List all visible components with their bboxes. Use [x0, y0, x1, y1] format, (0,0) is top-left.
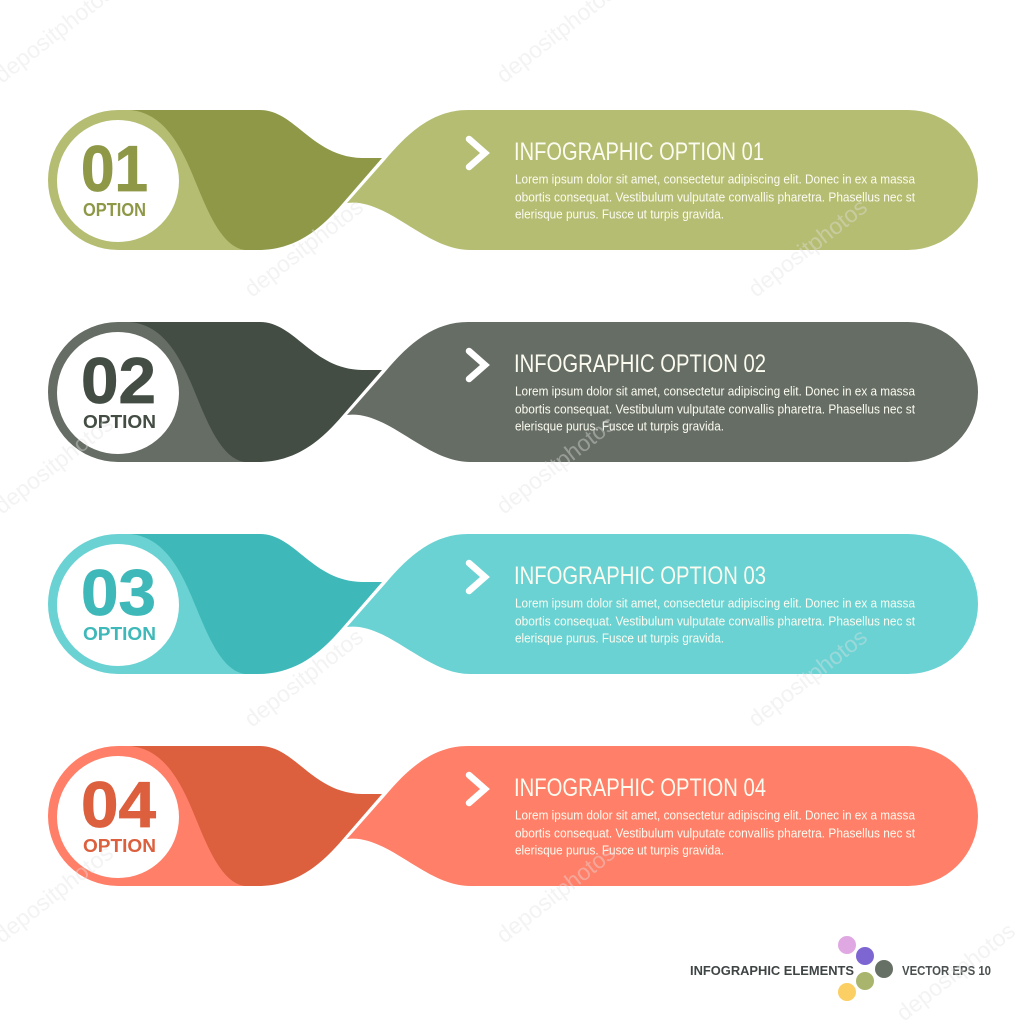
chevron icon: [469, 775, 485, 803]
footer version: VECTOR EPS 10: [902, 963, 991, 978]
number: 04: [81, 768, 156, 841]
watermarks: depositphotos: [743, 623, 872, 732]
watermarks: depositphotos: [891, 917, 1020, 1024]
heading: INFOGRAPHIC OPTION 01: [514, 138, 764, 166]
chevron icon: [469, 351, 485, 379]
body text: [515, 596, 916, 646]
right pill: [347, 322, 978, 462]
number circle: [57, 544, 179, 666]
body text: Lorem ipsum dolor sit amet, consectetur adipiscing elit. Donec in ex a massa: [515, 384, 916, 398]
dark twisted ribbon: [130, 110, 382, 250]
footer: [690, 936, 991, 1001]
body text: [515, 172, 916, 222]
body text: elerisque purus. Fusce ut turpis gravida.: [515, 418, 724, 434]
number circle: [57, 120, 179, 242]
option label: OPTION: [83, 624, 156, 644]
number circle: [57, 756, 179, 878]
left pill base: [48, 534, 262, 674]
option label: OPTION: [83, 836, 156, 856]
body text: [515, 808, 916, 858]
number: 03: [81, 556, 156, 629]
left pill base: [48, 746, 262, 886]
dark twisted ribbon: [130, 534, 382, 674]
panel: option 03: [48, 534, 978, 674]
watermarks: depositphotos: [491, 410, 620, 519]
number: 02: [81, 344, 156, 417]
option label: OPTION: [83, 412, 156, 432]
panel: option 04: [48, 746, 978, 886]
panel: option 02: [48, 322, 978, 462]
right pill: [347, 110, 978, 250]
option label: OPTION: [83, 200, 146, 220]
heading: INFOGRAPHIC OPTION 04: [514, 774, 766, 802]
body text: obortis consequat. Vestibulum vulputate convallis pharetra. Phasellus nec st: [515, 190, 915, 204]
body text: Lorem ipsum dolor sit amet, consectetur adipiscing elit. Donec in ex a massa: [515, 596, 916, 610]
chevron icon: [469, 139, 485, 167]
heading: INFOGRAPHIC OPTION 03: [514, 562, 766, 590]
right pill: [347, 746, 978, 886]
left pill base: [48, 322, 262, 462]
footer dots icon: [838, 936, 893, 1001]
body text: elerisque purus. Fusce ut turpis gravida.: [515, 206, 724, 222]
body text: obortis consequat. Vestibulum vulputate convallis pharetra. Phasellus nec st: [515, 402, 915, 416]
number circle: [57, 332, 179, 454]
body text: [515, 384, 916, 434]
body text: obortis consequat. Vestibulum vulputate convallis pharetra. Phasellus nec st: [515, 826, 915, 840]
dark twisted ribbon: [130, 746, 382, 886]
watermarks: depositphotos: [239, 193, 368, 302]
footer title: INFOGRAPHIC ELEMENTS: [690, 964, 854, 978]
watermarks: depositphotos: [491, 839, 620, 948]
body text: elerisque purus. Fusce ut turpis gravida.: [515, 842, 724, 858]
right pill: [347, 534, 978, 674]
body text: Lorem ipsum dolor sit amet, consectetur adipiscing elit. Donec in ex a massa: [515, 172, 916, 186]
body text: Lorem ipsum dolor sit amet, consectetur adipiscing elit. Donec in ex a massa: [515, 808, 916, 822]
left pill base: [48, 110, 262, 250]
dark twisted ribbon: [130, 322, 382, 462]
number: 01: [81, 132, 148, 205]
body text: obortis consequat. Vestibulum vulputate convallis pharetra. Phasellus nec st: [515, 614, 915, 628]
body text: elerisque purus. Fusce ut turpis gravida.: [515, 630, 724, 646]
watermarks: depositphotos: [239, 623, 368, 732]
chevron icon: [469, 563, 485, 591]
heading: INFOGRAPHIC OPTION 02: [514, 350, 766, 378]
watermarks: depositphotos: [743, 193, 872, 302]
panel: option 01: [48, 110, 978, 250]
